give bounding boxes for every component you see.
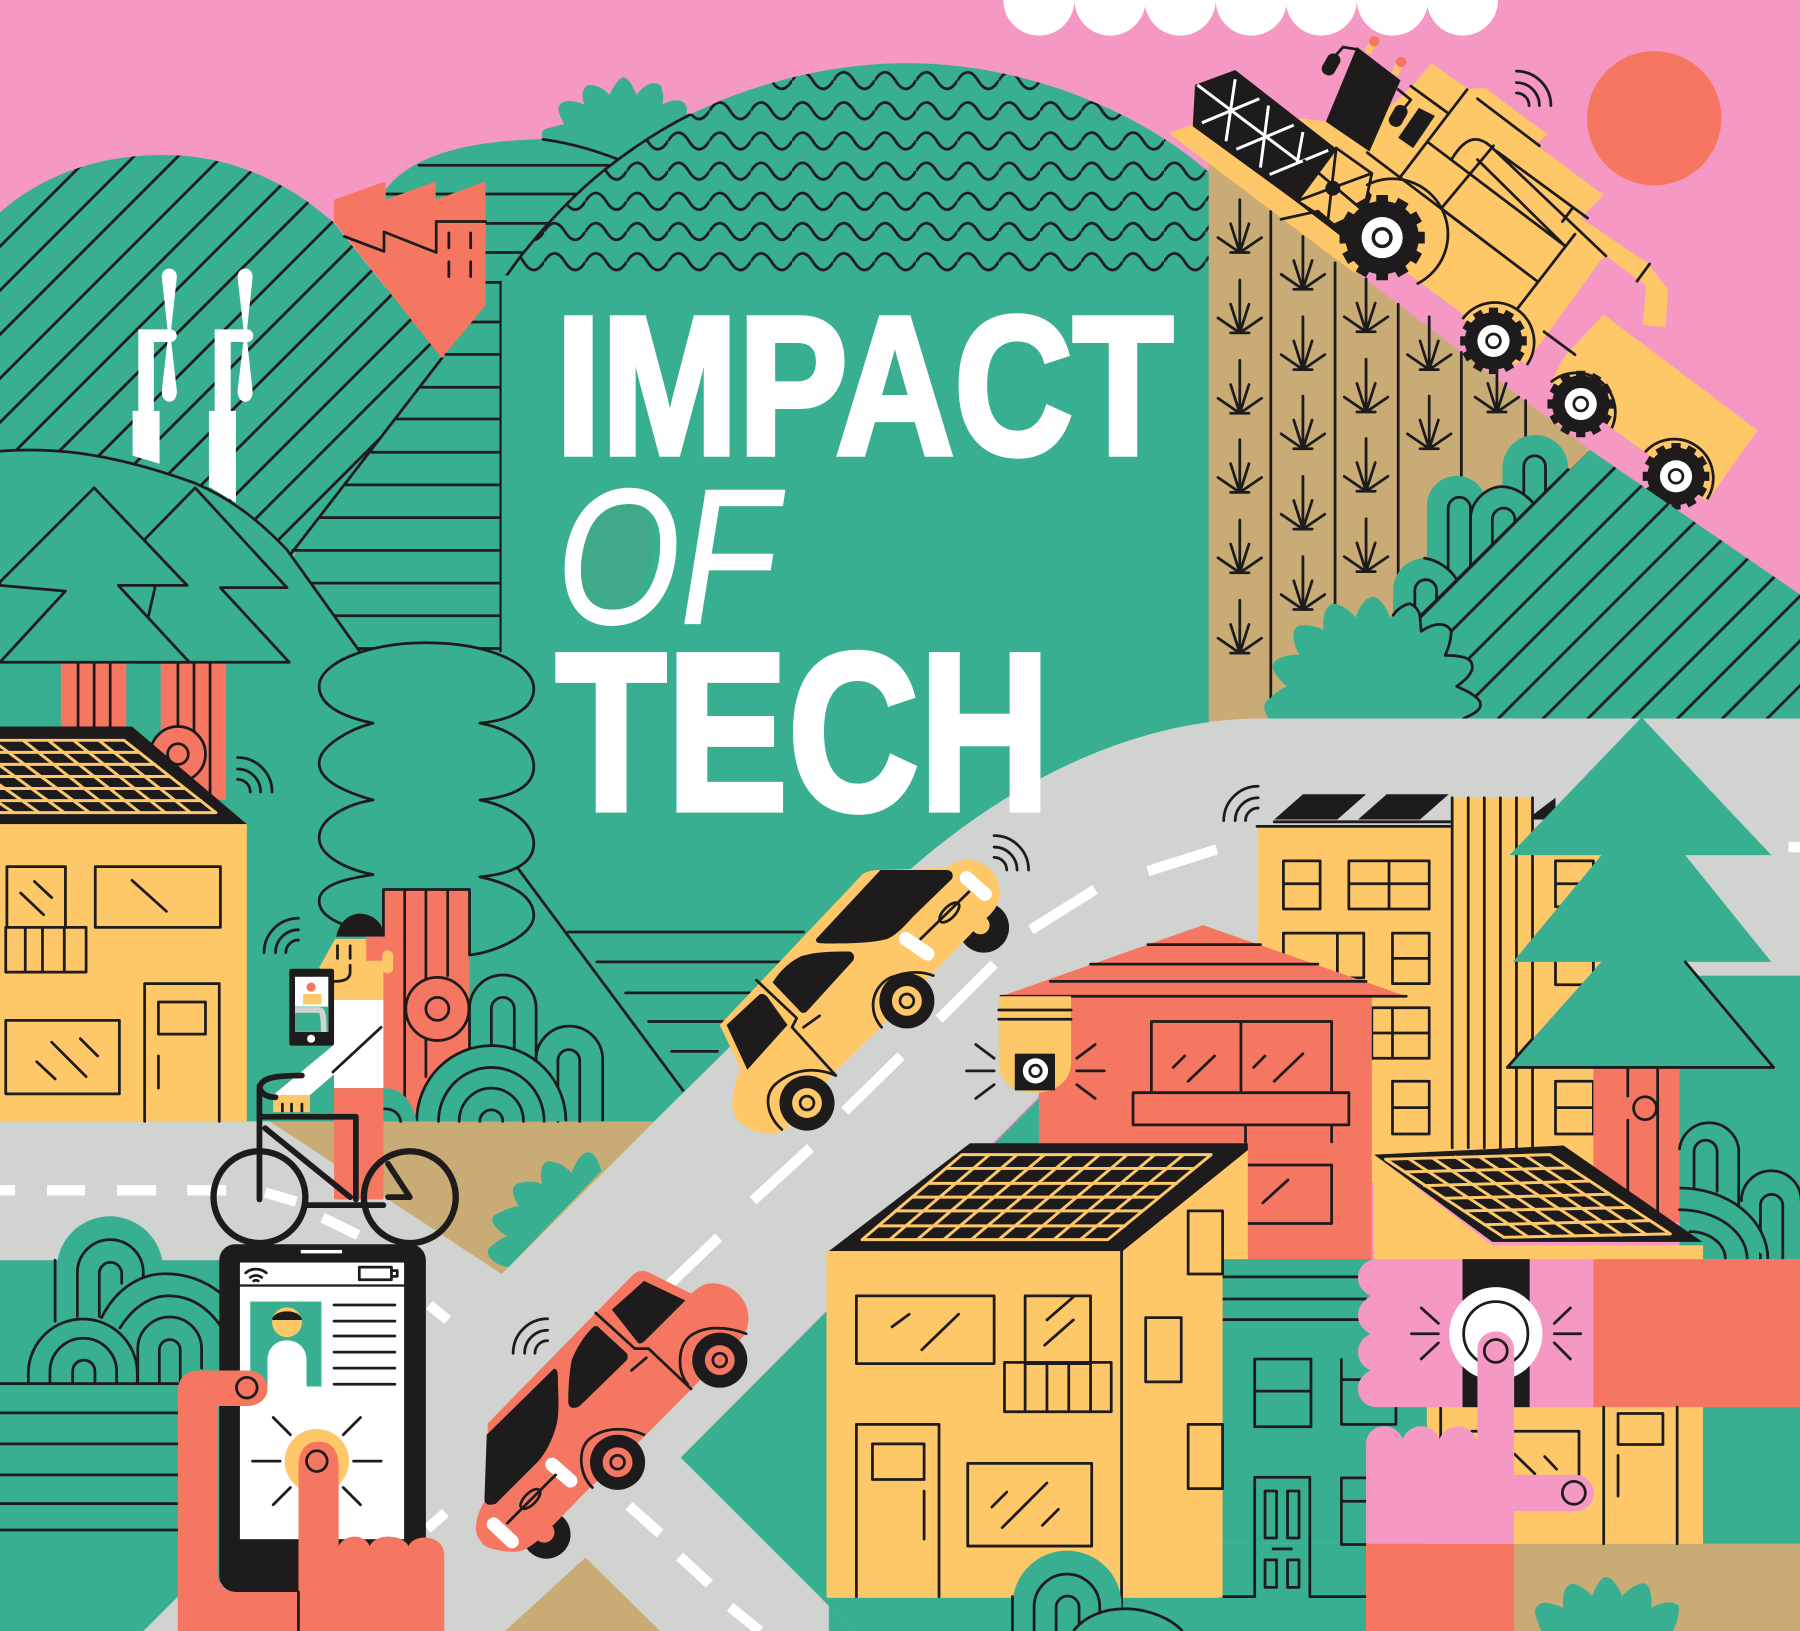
- article lines: [334, 1305, 395, 1384]
- tan ground bottom: [505, 1558, 660, 1631]
- hill: wavy main hill: [502, 63, 1209, 282]
- centre tree: [319, 643, 804, 1121]
- hill: horizontal striped slope: [276, 282, 502, 652]
- roof: [0, 727, 247, 824]
- rear wheel: [522, 1510, 571, 1559]
- bike: [259, 1075, 410, 1205]
- body: [720, 860, 1000, 1134]
- left house: [0, 727, 247, 1121]
- bottom left road wedge: [143, 1597, 178, 1631]
- title: IMPACT: [556, 275, 1173, 496]
- handheld phone: [289, 969, 334, 1046]
- house details: [856, 1211, 1223, 1608]
- red car wifi: [513, 1319, 548, 1353]
- tree crown right: [138, 488, 289, 662]
- combine harvester: [1169, 36, 1758, 522]
- front lights and grille: [906, 878, 985, 954]
- field lines: [0, 1384, 178, 1530]
- large smartphone: [178, 1244, 444, 1631]
- pink button panel: [1358, 1259, 1593, 1407]
- harvester reel: [1193, 70, 1372, 247]
- bushes behind right slope: [1393, 435, 1568, 643]
- title: OF: [557, 448, 785, 664]
- solar grid: [862, 1155, 1211, 1240]
- main yellow house: [827, 1143, 1248, 1608]
- bottom right colour blocks: [1366, 1259, 1800, 1631]
- round green hill behind trees: [0, 450, 362, 735]
- harvester lines: [1367, 86, 1650, 355]
- chimneys and turbines: [133, 269, 253, 503]
- wifi: [264, 918, 298, 953]
- right solar roof house: [1374, 1145, 1703, 1260]
- green townhouse: [1220, 1259, 1427, 1631]
- harvester cab: [1326, 47, 1401, 152]
- bushes beside centre tree: [383, 975, 603, 1121]
- road dashes: [0, 847, 1800, 1631]
- wheels: [692, 1333, 747, 1388]
- apartment building: [1257, 794, 1601, 1182]
- hill: diagonal striped left hill: [0, 155, 442, 666]
- cyclist: [214, 914, 456, 1243]
- title: [556, 275, 1173, 858]
- bottom arch bush: [1012, 1551, 1182, 1631]
- harvester wheels: [1462, 303, 1534, 365]
- trunk: [383, 890, 470, 1121]
- tree crown left: [0, 488, 189, 662]
- harvester header: [1169, 118, 1378, 273]
- front wall: [827, 1251, 1123, 1598]
- large pine tree: [1507, 717, 1774, 1222]
- apartment wifi: [1224, 786, 1258, 821]
- roof: [829, 1143, 1248, 1251]
- tan ground triangle: [270, 1121, 654, 1274]
- harvester trailer: [1551, 314, 1758, 502]
- red car: [476, 1271, 748, 1559]
- right chimney: [209, 329, 253, 503]
- house body: [0, 824, 247, 1121]
- harvester body: [1303, 63, 1668, 365]
- green strip under house: [821, 1598, 1366, 1631]
- yellow car: [720, 860, 1009, 1134]
- hand: [178, 1370, 444, 1631]
- wheels: [879, 973, 934, 1028]
- mountain lines: [517, 867, 804, 1090]
- roadside bush: [488, 1152, 602, 1267]
- tan crop field: [1209, 163, 1589, 721]
- yellow car wifi: [994, 836, 1029, 870]
- solar grid: [0, 740, 216, 813]
- pink pointing hand: [1366, 1331, 1594, 1544]
- trees left: [0, 488, 289, 800]
- right green block: [1679, 976, 1800, 1259]
- solar grid: [1386, 1155, 1670, 1237]
- tall arch: [57, 1216, 163, 1322]
- legs: [334, 1088, 383, 1199]
- crown: [319, 643, 534, 955]
- torso and arm: [273, 1000, 383, 1095]
- hill: right diagonal slope: [1420, 450, 1800, 721]
- front lights and grille: [494, 1465, 571, 1541]
- windows: [484, 1369, 558, 1505]
- centre green panel: [0, 275, 1209, 1125]
- windows and door: [6, 867, 220, 1121]
- left blades: [162, 269, 177, 402]
- left dome: [28, 1319, 137, 1384]
- title: TECH: [556, 606, 1050, 858]
- harvester wifi: [1516, 71, 1551, 106]
- right arch stack: [102, 1274, 220, 1384]
- right blades: [238, 269, 253, 402]
- bush on field: [1264, 597, 1480, 719]
- security camera: [967, 996, 1104, 1098]
- O counter tint: [563, 487, 665, 621]
- tree trunks: [61, 662, 226, 800]
- tan corner bush: [1535, 1577, 1679, 1631]
- side wall: [1123, 1150, 1248, 1598]
- body: [476, 1271, 748, 1552]
- white scallops at top edge: [1003, 0, 1498, 36]
- coral house: [1001, 925, 1406, 1260]
- main road: [0, 719, 1800, 1631]
- status bar icons: [246, 1267, 397, 1281]
- trunk ring: [406, 977, 469, 1040]
- hill: horizontal striped back hill: [386, 139, 643, 344]
- yellow house behind hand: [1427, 1407, 1703, 1544]
- right arch bushes: [1679, 1123, 1800, 1259]
- tap rays: [253, 1418, 381, 1505]
- bush on hill: [542, 77, 687, 166]
- head: [319, 939, 383, 1000]
- sun: [1587, 51, 1721, 185]
- factory: [334, 181, 486, 358]
- wifi near left house: [238, 758, 272, 792]
- profile photo: [250, 1302, 321, 1387]
- solar panels: [1274, 794, 1555, 820]
- lower right green ground: [681, 1098, 1039, 1631]
- rear wheel: [959, 902, 1009, 953]
- left chimney: [133, 329, 177, 464]
- bottom left green block: [0, 1216, 220, 1631]
- windows: [816, 870, 953, 943]
